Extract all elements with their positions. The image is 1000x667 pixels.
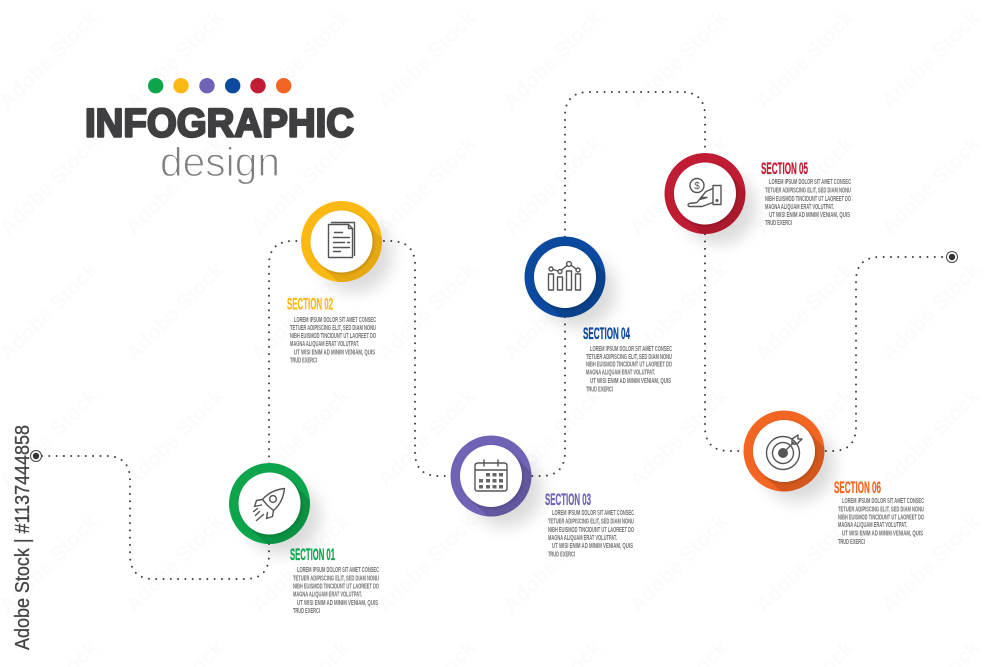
node 02: documents	[301, 201, 397, 297]
icon: documents	[328, 222, 354, 258]
section 06 text: SECTION 06	[834, 479, 881, 497]
body 03: TRUD EXERCI	[548, 552, 575, 558]
body 06: MAGNA ALIQUAM ERAT VOLUTPAT.	[838, 522, 907, 529]
end marker	[946, 252, 958, 262]
section 04 text	[583, 325, 672, 394]
section 03 text	[545, 491, 634, 558]
side credit: Adobe Stock | #1137444858	[12, 425, 34, 650]
body 04: TRUD EXERCI	[586, 386, 613, 394]
body 01: UT WISI ENIM AD MINIM VENIAM, QUIS	[297, 600, 378, 607]
section 04 text: SECTION 04	[583, 325, 630, 343]
body 06: NIBH EUISMOD TINCIDUNT UT LAOREET DO	[838, 514, 924, 522]
body 05: TETUER ADIPISCING ELIT, SED DIAM NONU	[765, 188, 851, 194]
section 02 text	[287, 296, 376, 364]
body 06: LOREM IPSUM DOLOR SIT AMET CONSEC	[842, 498, 924, 505]
body 04: LOREM IPSUM DOLOR SIT AMET CONSEC	[590, 346, 672, 353]
section 01 text: SECTION 01	[290, 546, 335, 564]
body 06: TETUER ADIPISCING ELIT, SED DIAM NONU	[838, 506, 924, 514]
dotted route line	[42, 92, 947, 579]
section 02 text: SECTION 02	[287, 296, 333, 314]
icon: target	[766, 435, 802, 470]
node 01: rocket	[229, 463, 325, 559]
body 04	[586, 346, 672, 394]
body 01: TETUER ADIPISCING ELIT, SED DIAM NONU	[293, 576, 379, 582]
body 05: LOREM IPSUM DOLOR SIT AMET CONSEC	[769, 179, 851, 186]
node 04: chart	[524, 236, 620, 332]
body 03	[548, 510, 634, 558]
colour dots	[148, 78, 291, 93]
body 06: TRUD EXERCI	[838, 539, 865, 546]
body 04: MAGNA ALIQUAM ERAT VOLUTPAT.	[586, 370, 655, 376]
body 01: TRUD EXERCI	[293, 608, 320, 615]
body 05: TRUD EXERCI	[765, 220, 792, 227]
body 02: TETUER ADIPISCING ELIT, SED DIAM NONU	[290, 325, 376, 332]
body 02: UT WISI ENIM AD MINIM VENIAM, QUIS	[294, 350, 375, 356]
icon: chart	[548, 262, 580, 290]
section 01 text	[290, 546, 379, 615]
body 01: NIBH EUISMOD TINCIDUNT UT LAOREET DO	[293, 584, 379, 590]
body 05: NIBH EUISMOD TINCIDUNT UT LAOREET DO	[765, 196, 851, 203]
body 01: LOREM IPSUM DOLOR SIT AMET CONSEC	[297, 567, 379, 574]
body 03: UT WISI ENIM AD MINIM VENIAM, QUIS	[552, 543, 633, 550]
body 05	[765, 179, 851, 227]
section 05 text	[761, 160, 851, 227]
body 01: MAGNA ALIQUAM ERAT VOLUTPAT.	[293, 592, 362, 598]
node 03: calendar	[450, 436, 546, 532]
body 04: UT WISI ENIM AD MINIM VENIAM, QUIS	[590, 378, 671, 385]
body 01	[293, 567, 379, 615]
icon: money in hand: $	[694, 181, 700, 192]
body 06: UT WISI ENIM AD MINIM VENIAM, QUIS	[842, 530, 923, 538]
body 04: TETUER ADIPISCING ELIT, SED DIAM NONU	[586, 354, 672, 361]
node 05: money in hand	[664, 153, 760, 249]
body 02: TRUD EXERCI	[290, 358, 317, 364]
node 06: target	[744, 410, 840, 506]
body 03: MAGNA ALIQUAM ERAT VOLUTPAT.	[548, 535, 617, 542]
icon: rocket	[254, 488, 284, 520]
section 06 text	[834, 479, 924, 546]
body 06	[838, 498, 924, 546]
section 03 text: SECTION 03	[545, 491, 591, 509]
icon: calendar	[475, 460, 507, 491]
start marker	[30, 450, 42, 462]
body 03: NIBH EUISMOD TINCIDUNT UT LAOREET DO	[548, 527, 634, 534]
subtitle: design	[160, 139, 280, 185]
body 03: LOREM IPSUM DOLOR SIT AMET CONSEC	[552, 510, 634, 517]
body 02: NIBH EUISMOD TINCIDUNT UT LAOREET DO	[290, 333, 376, 340]
section 05 text: SECTION 05	[761, 160, 808, 178]
body 02	[290, 317, 376, 364]
body 02: LOREM IPSUM DOLOR SIT AMET CONSEC	[294, 317, 376, 324]
body 04: NIBH EUISMOD TINCIDUNT UT LAOREET DO	[586, 362, 672, 368]
body 03: TETUER ADIPISCING ELIT, SED DIAM NONU	[548, 518, 634, 526]
body 05: MAGNA ALIQUAM ERAT VOLUTPAT.	[765, 204, 834, 211]
title: INFOGRAPHIC	[85, 102, 354, 146]
body 02: MAGNA ALIQUAM ERAT VOLUTPAT.	[290, 341, 359, 348]
body 05: UT WISI ENIM AD MINIM VENIAM, QUIS	[769, 212, 850, 219]
